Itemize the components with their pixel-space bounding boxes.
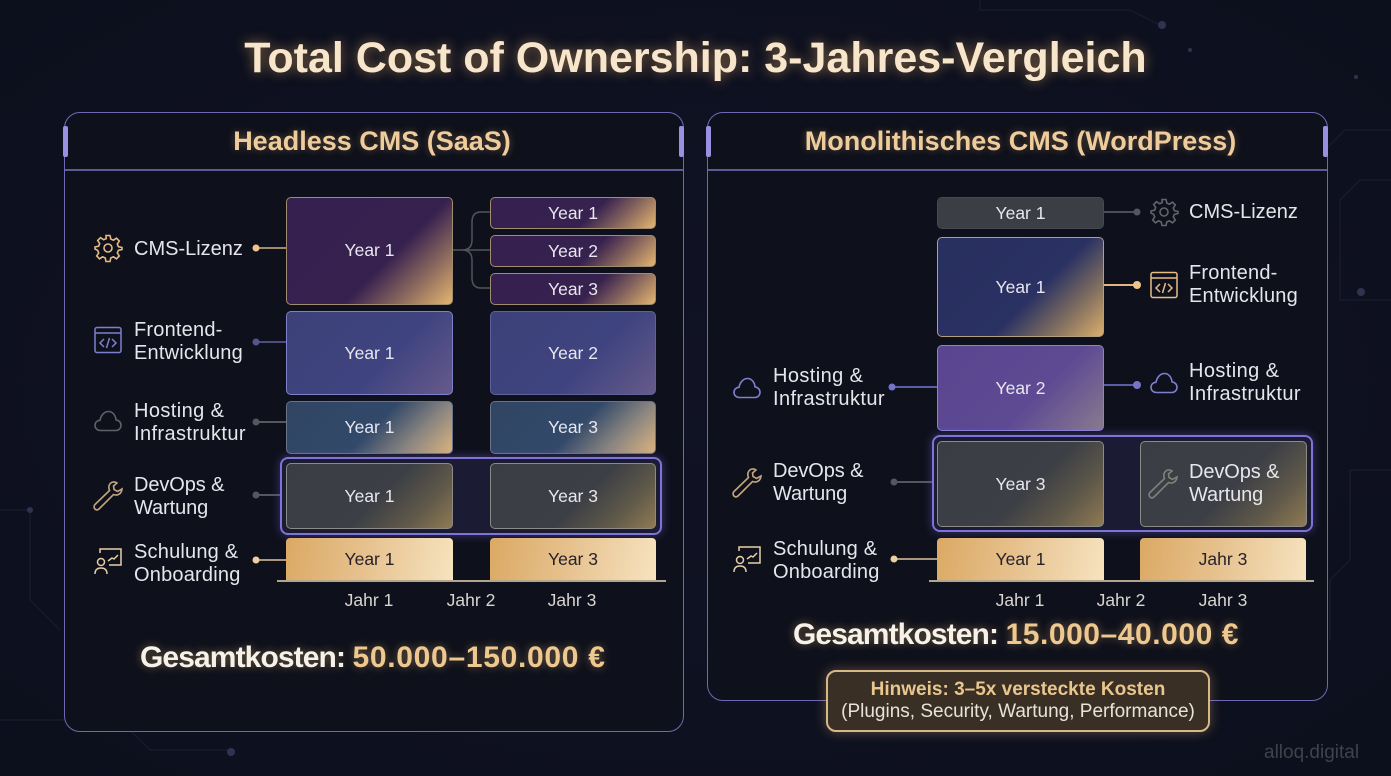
bar: training year 3 (490, 538, 656, 581)
label: Schulung (773, 538, 880, 583)
icon: gear (94, 234, 123, 262)
axis label Jahr 1: Jahr 1 (345, 590, 393, 610)
bar: CMS license small year 1: Year 1 (548, 202, 598, 222)
label: DevOps in tile: Wartung (1189, 484, 1263, 506)
callout: hidden costs: (Plugins, Security, Wartung, Performance) (841, 701, 1195, 722)
bar: frontend year 1: Year 1 (345, 342, 394, 362)
bar: training year 1: Year 1 (345, 549, 394, 569)
callout: hidden costs: Hinweis: 3–5x versteckte Kosten (871, 679, 1165, 700)
axis label Jahr 3: Jahr 3 (1199, 590, 1247, 610)
label: DevOps in tile: DevOps & (1189, 461, 1279, 483)
bar: CMS license year 1: Year 1 (996, 202, 1045, 222)
highlight frame (932, 435, 1313, 532)
icon: cloud (94, 410, 122, 432)
panel heading: Headless CMS (SaaS) (233, 126, 511, 156)
label: DevOps in tile (1189, 461, 1280, 506)
bar: devops label tile (1140, 441, 1307, 527)
label: Hosting right: Infrastruktur (1189, 383, 1301, 405)
bar: devops year 3 (937, 441, 1104, 527)
bar: devops year 3: Year 3 (996, 474, 1045, 494)
bar: training year 3: Year 3 (548, 549, 598, 569)
bar: devops year 3 (490, 463, 656, 529)
highlight frame (280, 457, 662, 535)
icon: wrench in tile (1148, 469, 1178, 499)
label: Schulung: Onboarding (773, 561, 880, 583)
panel: monolithic CMS (706, 112, 1328, 739)
label: Frontend (1189, 262, 1298, 307)
bar: CMS license year 1 (937, 197, 1104, 229)
bar: CMS license small year 3: Year 3 (548, 278, 598, 298)
title: Total Cost of Ownership: 3-Jahres-Vergleich (244, 34, 1147, 82)
label: Schulung: Schulung & (134, 541, 238, 563)
label: Hosting left (773, 365, 885, 410)
label: DevOps: Wartung (134, 497, 208, 519)
bar: CMS license small year 1 (490, 197, 656, 229)
axis label Jahr 2: Jahr 2 (1097, 590, 1145, 610)
icon: code window (1150, 272, 1178, 298)
label: DevOps: DevOps & (134, 474, 224, 496)
header divider (708, 169, 1327, 171)
bar: hosting year 3 (490, 401, 656, 454)
watermark: alloq.digital (1264, 742, 1359, 763)
icon: wrench (93, 481, 123, 511)
bar: CMS license small year 3 (490, 273, 656, 305)
label: CMS-Lizenz: CMS-Lizenz (1189, 201, 1298, 223)
panel: headless CMS (63, 112, 684, 732)
bar: CMS license year 1: Year 1 (345, 240, 394, 260)
label: Frontend: Entwicklung (134, 342, 243, 364)
icon: gear (1150, 198, 1179, 226)
icon: cloud right (1150, 372, 1178, 394)
axis label Jahr 1: Jahr 1 (996, 590, 1044, 610)
total cost: Gesamtkosten: 50.000–150.000 € (140, 641, 606, 674)
label: CMS-Lizenz: CMS-Lizenz (134, 238, 243, 260)
bar: training year 1 (286, 538, 453, 581)
total cost: Gesamtkosten: 15.000–40.000 € (793, 618, 1239, 651)
axis label Jahr 3: Jahr 3 (548, 590, 596, 610)
connector lines (252, 211, 490, 564)
bar: devops year 1: Year 1 (345, 486, 394, 506)
left accent (63, 126, 68, 157)
label: Frontend (134, 319, 243, 364)
right accent (679, 126, 684, 157)
label: Hosting (134, 400, 246, 445)
icon: training (94, 548, 122, 574)
icon: cloud left (733, 378, 761, 398)
icon: code window (94, 326, 122, 354)
label: Hosting: Hosting & (134, 400, 224, 422)
panel heading: Monolithisches CMS (WordPress) (805, 126, 1236, 156)
bar: hosting year 2 (937, 345, 1104, 431)
bar: training Jahr 3 (1140, 538, 1306, 581)
bar: training year 1: Year 1 (996, 549, 1045, 569)
label: DevOps (134, 474, 224, 519)
label: Hosting left: Hosting & (773, 365, 863, 387)
axis (277, 580, 666, 582)
bar: frontend year 2 (490, 311, 656, 395)
label: Frontend: Frontend- (134, 319, 223, 341)
bar: frontend year 1 (286, 311, 453, 395)
bar: hosting year 1: Year 1 (345, 417, 394, 437)
axis label Jahr 2: Jahr 2 (447, 590, 495, 610)
bar: CMS license small year 2: Year 2 (548, 240, 598, 260)
label: Hosting right (1189, 360, 1301, 405)
bar: devops year 3: Year 3 (548, 486, 598, 506)
label: DevOps (773, 460, 864, 505)
bar: devops year 1 (286, 463, 453, 529)
label: DevOps: DevOps & (773, 460, 863, 482)
connector lines (888, 208, 1141, 562)
header divider (65, 169, 683, 171)
bar: CMS license year 1 (286, 197, 453, 305)
label: Hosting: Infrastruktur (134, 423, 246, 445)
label: Schulung: Onboarding (134, 564, 241, 586)
callout: hidden costs (826, 670, 1210, 732)
axis (929, 580, 1314, 582)
label: DevOps: Wartung (773, 483, 847, 505)
bar: hosting year 3: Year 3 (548, 417, 598, 437)
bar: hosting year 1 (286, 401, 453, 454)
panel frame (64, 112, 684, 732)
icon: wrench (732, 468, 762, 498)
right accent (1323, 126, 1328, 157)
label: Hosting right: Hosting & (1189, 360, 1279, 382)
label: Hosting left: Infrastruktur (773, 388, 885, 410)
label: Frontend: Entwicklung (1189, 285, 1298, 307)
bar: CMS license small year 2 (490, 235, 656, 267)
icon: training (733, 546, 761, 572)
panel frame (707, 112, 1328, 701)
bar: frontend year 1: Year 1 (996, 276, 1045, 296)
bar: training year 1 (937, 538, 1104, 581)
label: Schulung (134, 541, 241, 586)
left accent (706, 126, 711, 157)
bar: frontend year 1 (937, 237, 1104, 337)
bar: frontend year 2: Year 2 (548, 342, 598, 362)
label: Frontend: Frontend- (1189, 262, 1278, 284)
bar: hosting year 2: Year 2 (996, 378, 1045, 398)
label: Schulung: Schulung & (773, 538, 877, 560)
bar: training Jahr 3: Jahr 3 (1199, 549, 1247, 569)
